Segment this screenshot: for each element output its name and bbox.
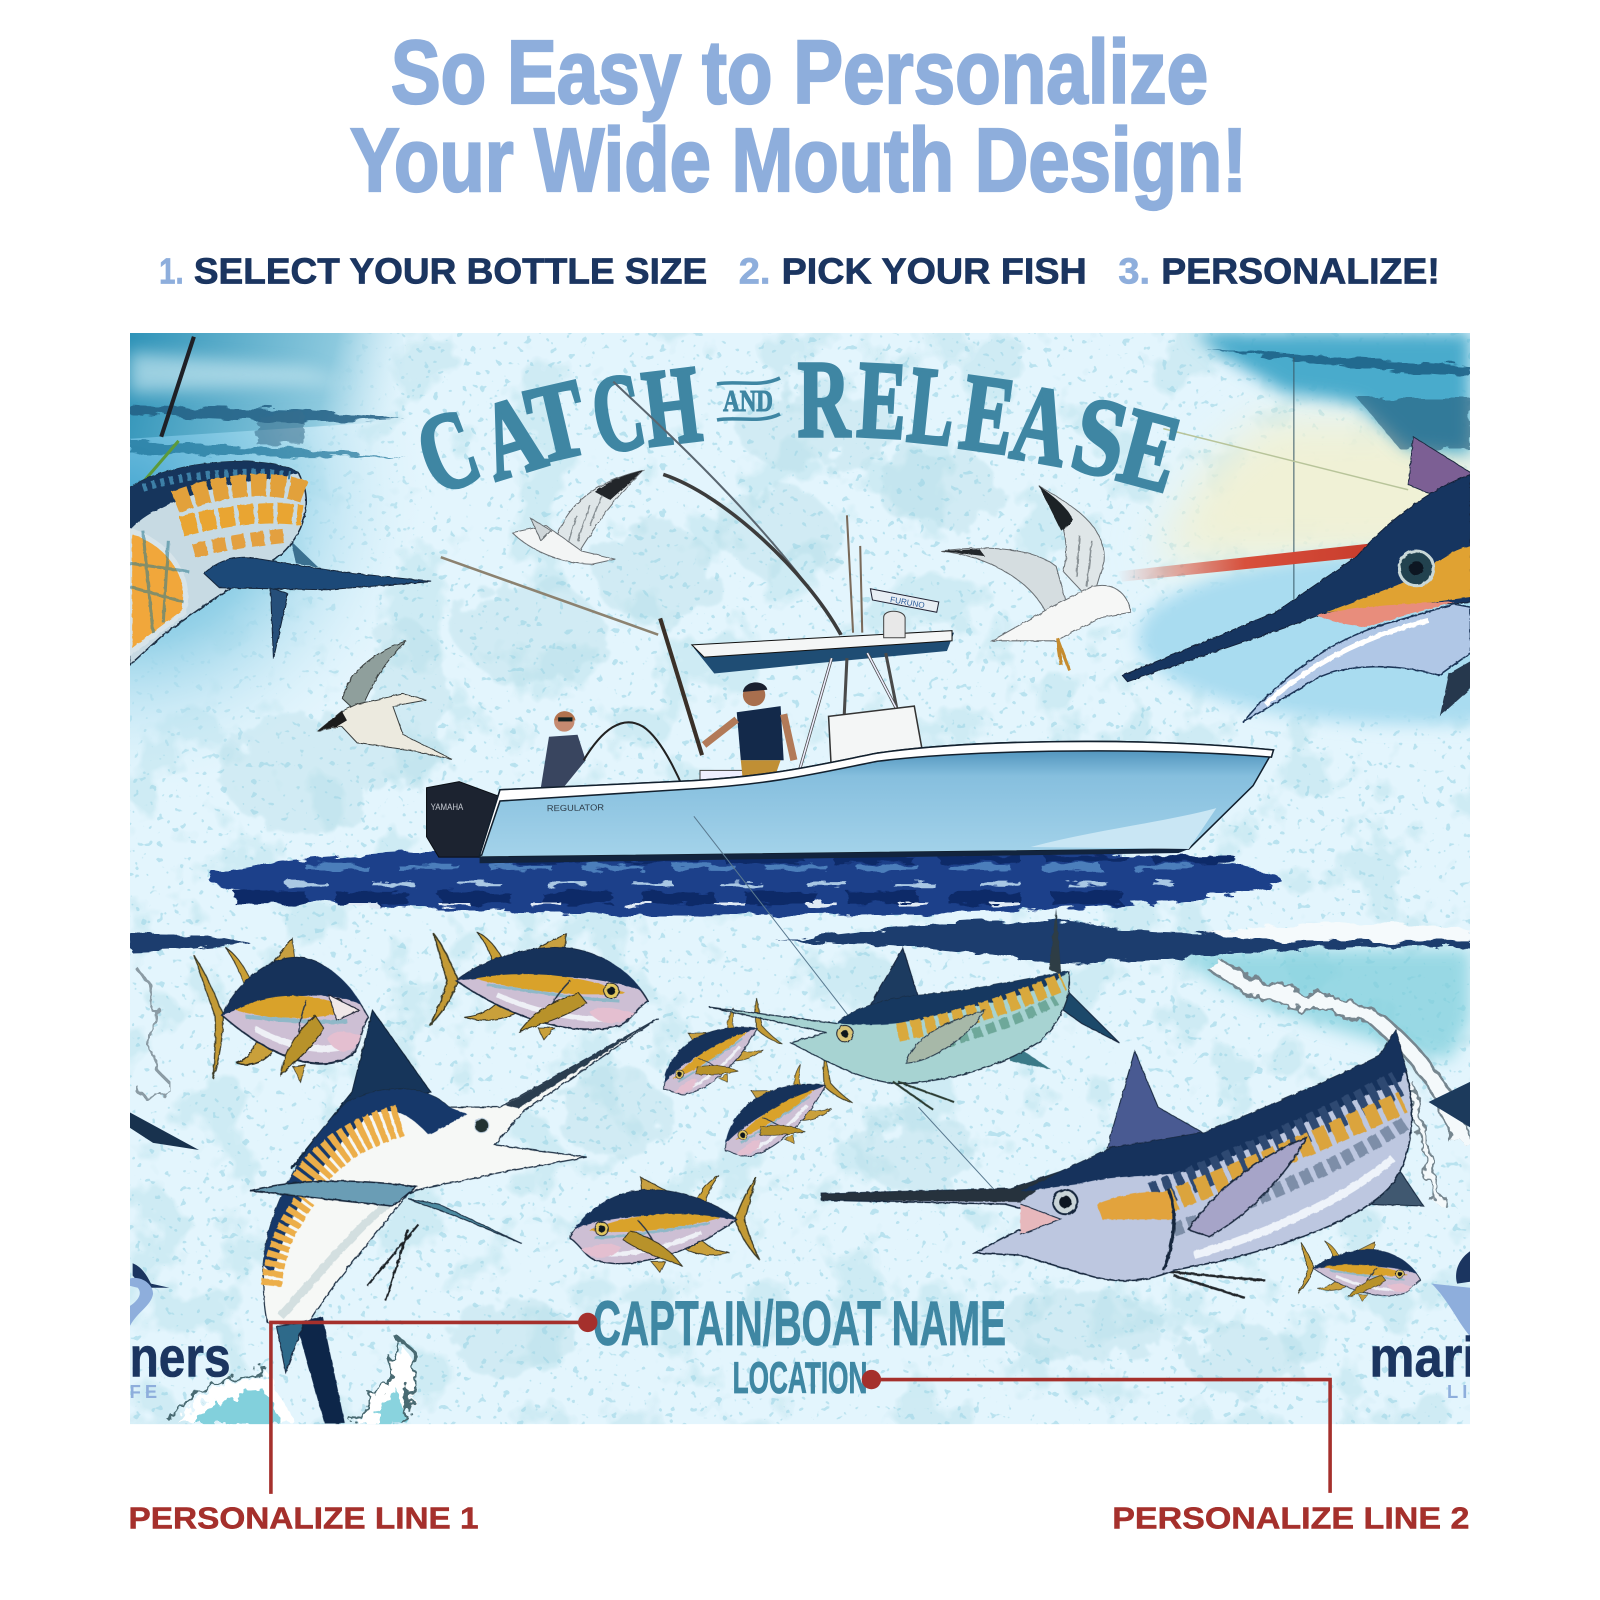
steps row: 1.	[159, 252, 184, 292]
red line	[1117, 544, 1372, 582]
outboard engine	[427, 782, 498, 857]
label: personalize line 1: PERSONALIZE LINE 1	[129, 1502, 479, 1536]
bird: gull left	[512, 470, 643, 564]
fishing rod	[582, 721, 681, 780]
personalized text: CAPTAIN/BOAT NAME	[593, 1289, 1006, 1359]
marlin: top left	[130, 462, 432, 665]
surface foam: left	[130, 933, 250, 1150]
steps row: PICK YOUR FISH	[782, 252, 1087, 292]
splatter texture	[130, 333, 1471, 1424]
heading: catch and release: R	[798, 339, 852, 461]
heading: catch and release: AND	[723, 384, 773, 418]
steps row: SELECT YOUR BOTTLE SIZE	[194, 252, 707, 292]
woman	[541, 711, 586, 788]
steps row: 2.	[739, 252, 770, 292]
boat	[427, 589, 1273, 863]
fishing line	[694, 816, 1000, 1196]
marlin: bottom right	[821, 1031, 1423, 1298]
top-left rod	[161, 337, 194, 437]
watercolor blotches	[130, 333, 1471, 1424]
callout line 2	[862, 1370, 1330, 1493]
title: So Easy to Personalize	[391, 23, 1208, 123]
steps row: PERSONALIZE!	[1161, 252, 1440, 292]
heading: catch and release: E	[855, 339, 909, 463]
water surface under boat	[209, 844, 1281, 915]
logo: left	[130, 1263, 231, 1402]
steps row: 3.	[1118, 252, 1150, 292]
marlin: jumping white	[250, 1010, 658, 1423]
tuna 2	[193, 937, 370, 1084]
heading: catch and release: H	[637, 343, 707, 471]
rods and lines	[441, 382, 862, 755]
tuna 3	[570, 1176, 760, 1273]
logo: right: mari	[1369, 1326, 1477, 1389]
man	[704, 682, 794, 781]
surface foam: right	[776, 921, 1470, 1204]
heading: catch and release: L	[903, 342, 961, 469]
bird: gull right	[941, 486, 1131, 670]
heading: catch and release: A	[467, 371, 557, 504]
heading: catch and release: C	[402, 385, 494, 518]
callout line 1	[271, 1313, 597, 1494]
heading: catch and release: E	[954, 350, 1022, 478]
heading: catch and release	[420, 362, 1180, 494]
panel: artwork	[130, 333, 1470, 1424]
tuna 1	[430, 932, 648, 1040]
title: Your Wide Mouth Design!	[350, 111, 1247, 211]
splash	[168, 1343, 418, 1423]
radar	[870, 589, 939, 638]
heading: catch and release: S	[1062, 372, 1138, 502]
tuna 5	[662, 998, 783, 1096]
heading: catch and release: E	[1108, 384, 1192, 516]
marlin: centre	[709, 908, 1119, 1110]
console seat	[700, 770, 742, 780]
hull: REGULATOR	[547, 802, 604, 813]
radar: FURUNO	[889, 595, 925, 610]
personalized text	[593, 1289, 1006, 1403]
logo: right	[1369, 1251, 1477, 1402]
tuna 4	[1298, 1241, 1420, 1301]
tuna 6	[724, 1060, 854, 1158]
outboard engine: YAMAHA	[431, 802, 464, 812]
steps row	[159, 252, 1440, 292]
marlin: top right	[1122, 437, 1470, 722]
label: personalize line 2: PERSONALIZE LINE 2	[1112, 1502, 1469, 1536]
heading: catch and release: C	[582, 348, 654, 478]
heading: catch and release: T	[516, 356, 598, 487]
logo: left: ners	[130, 1326, 231, 1389]
logo: right: LI	[1447, 1381, 1471, 1402]
hull	[480, 741, 1273, 863]
water corner: top right	[1130, 333, 1470, 733]
bird: tern	[318, 641, 452, 759]
title	[350, 23, 1247, 211]
personalized text: LOCATION	[733, 1352, 867, 1403]
heading: catch and release: A	[1004, 361, 1078, 490]
logo: left: FE	[130, 1381, 161, 1402]
water corner: top left	[130, 333, 408, 750]
tuna group	[191, 925, 1420, 1301]
t-top	[692, 631, 954, 776]
